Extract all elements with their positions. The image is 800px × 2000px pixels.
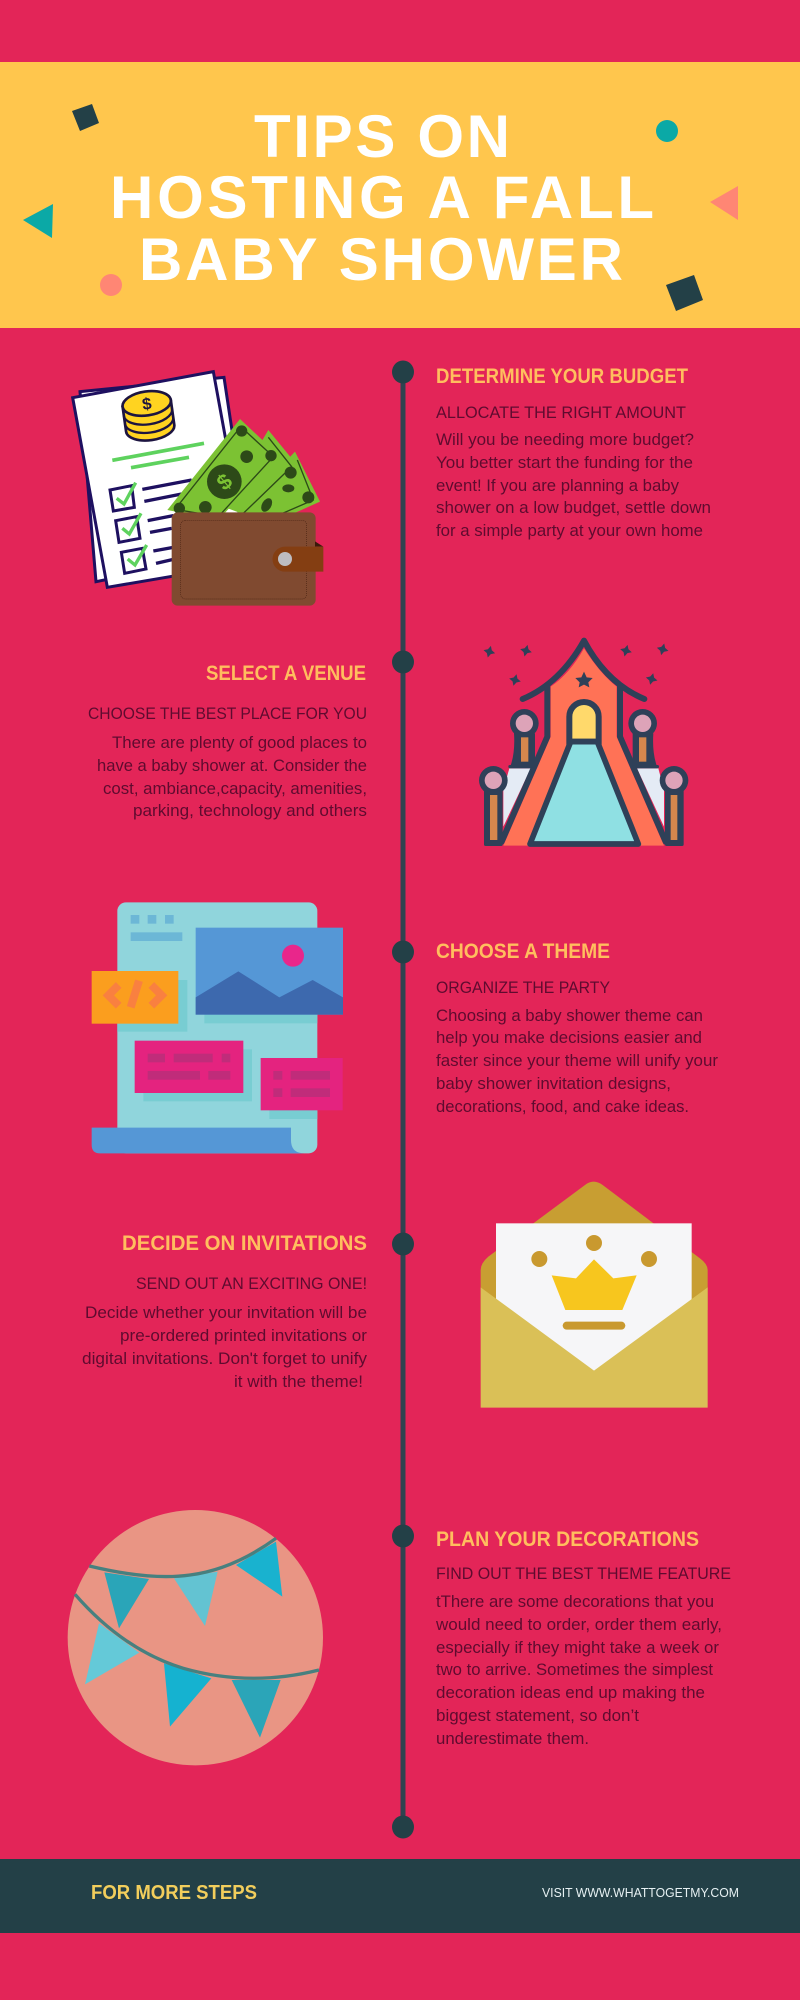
icon: teal triangle xyxy=(23,204,53,238)
footer website: VISIT WWW.WHATTOGETMY.COM xyxy=(542,1886,739,1900)
icon: teal circle xyxy=(656,120,678,142)
section 4 text: it with the theme! xyxy=(234,1372,363,1391)
icon: dark diamond bottom right xyxy=(666,275,703,311)
section 5 text: decoration ideas end up making the xyxy=(436,1683,705,1702)
title: BABY SHOWER xyxy=(139,226,623,293)
section 3 text: faster since your theme will unify your xyxy=(436,1051,718,1070)
icon: budget checklist and wallet: $ xyxy=(141,394,153,414)
icon: dark diamond top left xyxy=(72,104,99,131)
section 5 text: PLAN YOUR DECORATIONS xyxy=(436,1528,699,1551)
section 4 text: Decide whether your invitation will be xyxy=(85,1303,367,1322)
header banner xyxy=(0,62,800,328)
section 2 text: cost, ambiance,capacity, amenities, xyxy=(103,779,367,798)
section 3 text: CHOOSE A THEME xyxy=(436,940,610,963)
section 1 text: for a simple party at your own home xyxy=(436,521,703,540)
icon: budget checklist and wallet: $ xyxy=(212,468,237,495)
icon: bunting decoration xyxy=(68,1510,323,1765)
section 5 text: would need to order, order them early, xyxy=(435,1615,722,1634)
section 2 text: There are plenty of good places to xyxy=(112,733,367,752)
section 1 text: You better start the funding for the xyxy=(436,453,693,472)
icon: coral circle xyxy=(100,274,122,296)
icon: theme web page xyxy=(92,902,343,1153)
section 2 text: SELECT A VENUE xyxy=(206,662,366,685)
section 5 text: FIND OUT THE BEST THEME FEATURE xyxy=(436,1565,731,1583)
section 1 text: event! If you are planning a baby xyxy=(436,476,679,495)
section 4 text: SEND OUT AN EXCITING ONE! xyxy=(136,1275,367,1293)
section 5 text xyxy=(435,1528,731,1748)
section 4 text: DECIDE ON INVITATIONS xyxy=(122,1232,367,1255)
section 1 text: shower on a low budget, settle down xyxy=(436,498,711,517)
title: HOSTING A FALL xyxy=(110,164,654,231)
section 3 text: decorations, food, and cake ideas. xyxy=(436,1097,689,1116)
section 5 text: underestimate them. xyxy=(436,1729,589,1748)
section 3 text: Choosing a baby shower theme can xyxy=(436,1006,703,1025)
icon: budget checklist and wallet xyxy=(73,372,323,606)
section 3 text: help you make decisions easier and xyxy=(436,1028,702,1047)
section 5 text: biggest statement, so don’t xyxy=(436,1706,639,1725)
section 5 text: two to arrive. Sometimes the simplest xyxy=(436,1660,713,1679)
section 4 text: pre-ordered printed invitations or xyxy=(120,1326,367,1345)
section 3 text: ORGANIZE THE PARTY xyxy=(436,979,610,997)
section 3 text xyxy=(436,940,718,1116)
section 2 text: parking, technology and others xyxy=(133,801,367,820)
section 1 text: Will you be needing more budget? xyxy=(436,430,694,449)
title xyxy=(110,103,654,293)
section 1 text xyxy=(436,365,711,540)
section 5 text: especially if they might take a week or xyxy=(436,1638,719,1657)
section 2 text: have a baby shower at. Consider the xyxy=(97,756,367,775)
section 1 text: ALLOCATE THE RIGHT AMOUNT xyxy=(436,404,686,422)
section 1 text: DETERMINE YOUR BUDGET xyxy=(436,365,688,388)
section 5 text: tThere are some decorations that you xyxy=(436,1592,714,1611)
section 3 text: baby shower invitation designs, xyxy=(436,1074,671,1093)
title: TIPS ON xyxy=(254,103,510,170)
section 4 text: digital invitations. Don't forget to unify xyxy=(82,1349,367,1368)
icon: venue building xyxy=(479,641,688,846)
footer band xyxy=(0,1859,800,1933)
section 2 text: CHOOSE THE BEST PLACE FOR YOU xyxy=(88,705,367,723)
footer call to action: FOR MORE STEPS xyxy=(91,1882,257,1904)
section 4 text xyxy=(82,1232,367,1391)
icon: invitation envelope xyxy=(481,1182,708,1408)
icon: coral triangle xyxy=(710,186,738,220)
section 2 text xyxy=(88,662,367,820)
timeline xyxy=(392,360,414,1838)
